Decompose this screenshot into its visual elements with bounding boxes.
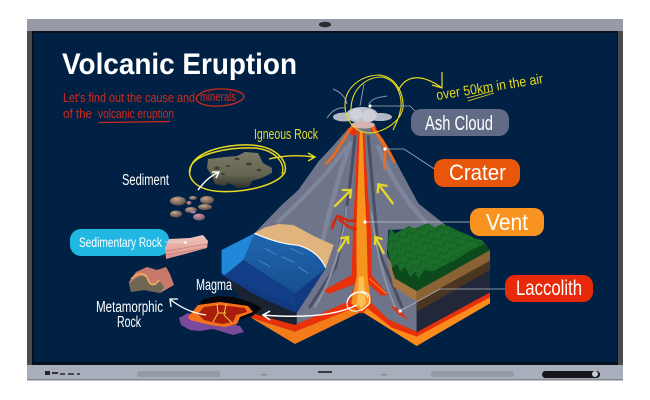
arrow: sediment to igneous rock [198, 172, 219, 190]
subtitle handwritten note [63, 89, 244, 122]
sea surface [243, 233, 326, 293]
metamorphic rock label [96, 299, 163, 331]
altitude note: over 50km in the air [435, 70, 544, 103]
screen background [34, 33, 617, 362]
yellow circle around ash cloud [345, 75, 403, 133]
ash cloud pill: Ash Cloud [425, 113, 493, 135]
red magma layer left [251, 298, 362, 332]
arrow loop to altitude note [398, 72, 442, 91]
molten centre [198, 305, 247, 324]
central vent lava [324, 132, 388, 314]
orange bottom layer right [362, 297, 490, 346]
magma label: Magma [196, 277, 232, 294]
rock streaks [278, 137, 425, 307]
sedimentary rock pill [70, 229, 169, 256]
sea block silhouette [222, 233, 326, 313]
crater pill: Crater [449, 160, 506, 185]
magma pool [179, 296, 262, 335]
leader dot: vent [363, 220, 367, 224]
icon: sediment pebbles [170, 196, 214, 220]
black crust [197, 296, 262, 319]
leader dot: laccolith [398, 309, 402, 313]
purple halo [179, 313, 244, 335]
metamorphic rock label: Rock [117, 314, 141, 331]
leader dot: crater [383, 147, 387, 151]
igneous rock label: Igneous Rock [254, 126, 318, 143]
orange bottom layer left [251, 305, 362, 344]
metamorphic rock label: Metamorphic [96, 299, 163, 316]
arrow: magma chamber to magma pool [263, 305, 357, 320]
glowing cracks [213, 304, 232, 323]
subtitle handwritten note: volcanic eruption [98, 107, 174, 121]
sedimentary rock pill: Sedimentary Rock [79, 234, 163, 250]
icon: igneous rock [207, 152, 272, 188]
laccolith pill: Laccolith [516, 277, 582, 300]
laccolith lava [390, 305, 408, 320]
icon: sedimentary rock slab [165, 235, 208, 259]
arrow to volcano [269, 153, 315, 161]
ripples [258, 248, 308, 273]
leader line: crater [385, 149, 439, 172]
arrow: magma to metamorphic rock [170, 299, 206, 315]
title: Volcanic Eruption [62, 48, 297, 81]
yellow hand-drawn circle [190, 145, 285, 192]
forest [387, 223, 490, 291]
sand shore [254, 224, 334, 268]
subtitle handwritten note: minerals [200, 90, 236, 104]
left block dark layer [222, 275, 297, 326]
white circle around magma chamber [347, 292, 370, 311]
crater lava streams [327, 127, 394, 169]
deep water band [225, 260, 295, 307]
volcano cross-section illustration [222, 125, 490, 346]
vent pill: Vent [486, 209, 529, 235]
shoreline foam [254, 233, 326, 268]
vent pill [470, 208, 544, 236]
ash cloud [327, 84, 392, 128]
mountain body [255, 127, 448, 333]
orange rim [188, 302, 253, 327]
right lava branch [369, 278, 387, 294]
subtitle handwritten note: of the [63, 107, 92, 121]
icon: metamorphic rock [129, 267, 174, 293]
bright blue cut face [222, 233, 254, 275]
sediment label: Sediment [122, 172, 169, 189]
side lava branch [332, 216, 357, 230]
crater rim [347, 125, 378, 137]
crater pill [434, 159, 520, 187]
leader line: vent [365, 221, 472, 223]
leader line: ash cloud [370, 106, 419, 115]
subtitle handwritten note: Let's find out the cause and [63, 91, 195, 105]
red magma layer right [365, 292, 490, 338]
yellow rising arrows [334, 184, 393, 254]
igneous rock group [190, 126, 318, 192]
ash cloud pill [411, 109, 509, 136]
leader dot: ash cloud [368, 104, 372, 108]
right block layers [417, 265, 490, 332]
leader line: laccolith [400, 289, 507, 311]
forest dark edge [392, 244, 490, 291]
